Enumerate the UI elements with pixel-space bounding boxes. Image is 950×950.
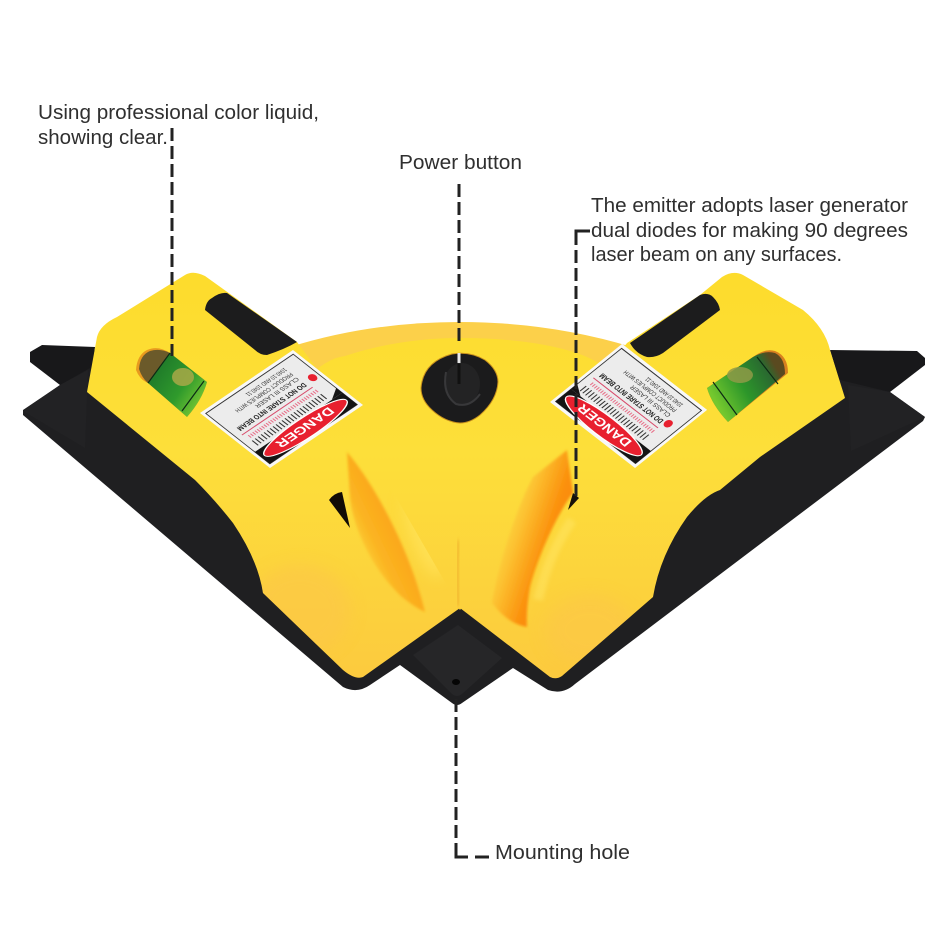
text: emitter description	[591, 195, 908, 266]
yellow dome rim	[290, 322, 632, 520]
left danger label	[200, 350, 363, 468]
leader line: emitter	[576, 231, 590, 496]
mounting plate detail	[413, 625, 502, 696]
right body shading	[538, 520, 635, 665]
black base plate	[23, 345, 925, 705]
right danger label: DO NOT STARE INTO BEAM	[597, 372, 666, 425]
left slide switch	[205, 293, 297, 355]
left danger label: PRODUCT COMPLIES WITH	[233, 371, 294, 413]
text: power button: Power button	[399, 152, 522, 174]
left danger label: DO NOT STARE INTO BEAM	[235, 381, 309, 432]
text: professional color liquid: Using professional color liquid,	[38, 102, 319, 124]
left yellow body	[87, 273, 460, 678]
left laser slot	[329, 492, 350, 528]
right slide switch	[630, 294, 720, 357]
text: emitter description: laser beam on any surfaces.	[591, 244, 842, 266]
left danger label: 1040.10 AND 1040.11	[243, 366, 288, 397]
right bubble vial	[707, 350, 788, 422]
right danger label: PRODUCT COMPLIES WITH	[623, 369, 679, 412]
right shadow crescent	[492, 450, 573, 627]
power button	[421, 353, 498, 423]
leader line: liquid	[170, 128, 174, 356]
right danger label	[550, 344, 707, 468]
left danger label: DANGER	[272, 404, 338, 450]
left body shading	[260, 510, 440, 650]
leader line: power button	[458, 184, 460, 384]
dome inner surface	[300, 338, 625, 610]
left danger label: CLASS III LASER	[252, 376, 300, 408]
text: emitter description: The emitter adopts laser generator	[591, 195, 908, 217]
leader line: mounting hole	[456, 699, 489, 857]
text: mounting hole: Mounting hole	[495, 842, 630, 864]
text: professional color liquid	[38, 102, 319, 149]
right laser slot	[568, 493, 579, 510]
right danger label: DANGER	[574, 401, 635, 449]
crease between halves	[458, 540, 459, 606]
infographic: right-angle laser level	[23, 104, 925, 863]
right danger label: 1040.10 AND 1040.11	[644, 375, 685, 407]
right danger label: CLASS III LASER	[629, 383, 673, 417]
left shadow crescent	[347, 452, 425, 612]
text: professional color liquid: showing clear.	[38, 127, 168, 149]
text: emitter description: dual diodes for making 90 degrees	[591, 220, 908, 242]
right yellow body	[460, 273, 845, 678]
left bubble vial	[136, 348, 207, 417]
